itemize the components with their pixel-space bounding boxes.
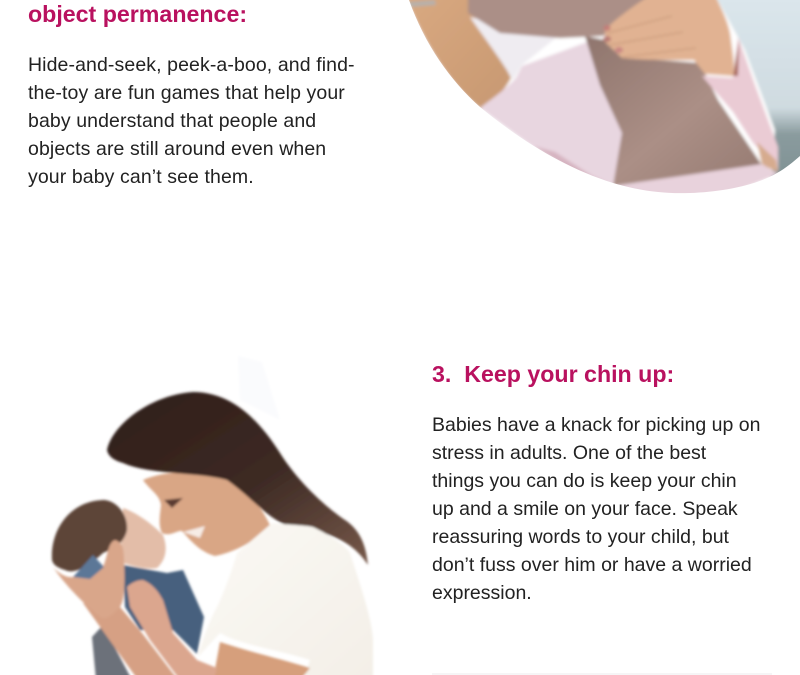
right sleeve — [702, 37, 778, 170]
eye — [164, 498, 183, 508]
text block: object permanence — [28, 54, 355, 188]
text block: keep your chin up — [432, 414, 760, 604]
baby's arm — [127, 580, 217, 675]
cuff shadow — [733, 40, 739, 76]
striped pink top — [480, 42, 623, 185]
text block: object permanence: Hide-and-seek, peek-a-boo, and find- — [28, 54, 355, 76]
mother's upper arm — [213, 642, 310, 675]
text block: keep your chin up: don’t fuss over him or have a worried — [432, 554, 752, 576]
background wall — [716, 0, 800, 176]
faint top of next photo — [432, 673, 772, 675]
text block: object permanence: objects are still around even when — [28, 138, 326, 160]
headband — [73, 555, 104, 579]
text block: keep your chin up: Babies have a knack for picking up on — [432, 414, 760, 436]
heading: object permanence: object permanence: — [28, 1, 247, 27]
text block: object permanence: your baby can’t see them. — [28, 166, 254, 188]
baby's face — [120, 508, 166, 568]
baby clothes body — [585, 36, 762, 186]
baby's hair — [52, 500, 127, 571]
towel — [92, 625, 132, 675]
mother's forearm — [83, 603, 178, 675]
hand — [605, 0, 734, 76]
text block: keep your chin up: expression. — [432, 582, 532, 604]
baby's overalls — [123, 565, 204, 654]
text block: keep your chin up: reassuring words to your child, but — [432, 526, 729, 548]
baby clothes top — [468, 0, 650, 38]
fingernails — [603, 25, 623, 53]
text block: keep your chin up: up and a smile on your face. Speak — [432, 498, 738, 520]
lower ruffle — [537, 146, 599, 178]
mother's hair — [107, 392, 368, 565]
text block: object permanence: baby understand that people and — [28, 110, 316, 132]
lower stripes — [617, 162, 778, 194]
heading: keep your chin up: 3. Keep your chin up: — [432, 361, 674, 387]
text block: keep your chin up: things you can do is keep your chin — [432, 470, 737, 492]
watch strap — [408, 0, 436, 7]
photo: mother smiling at baby — [50, 390, 374, 675]
mother's hand — [53, 540, 125, 618]
white shirt — [470, 17, 557, 80]
mother's shirt — [198, 523, 373, 675]
mother's face — [143, 472, 270, 556]
smile — [183, 526, 205, 538]
text block: object permanence: the-toy are fun games that help your — [28, 82, 345, 104]
photo: parent holding baby, top right — [409, 0, 800, 194]
text block: keep your chin up: stress in adults. One of the best — [432, 442, 706, 464]
background light panel — [238, 356, 280, 420]
mother's arm — [405, 0, 511, 110]
right forearm — [757, 142, 778, 172]
